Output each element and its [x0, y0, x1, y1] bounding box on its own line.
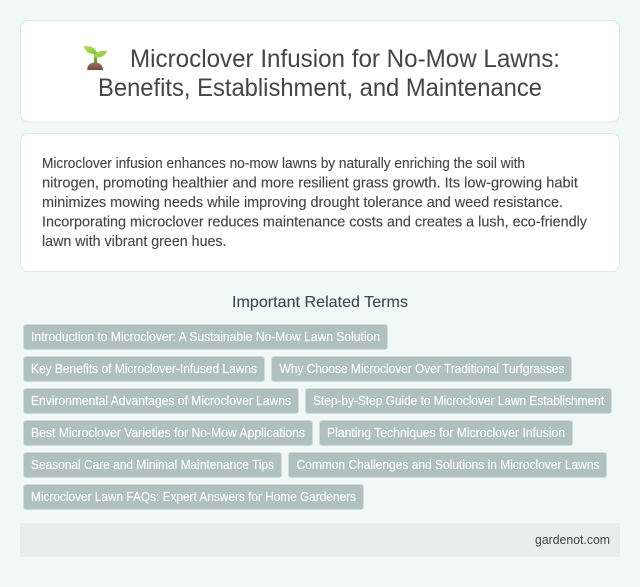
- tag: key benefits: Key Benefits of Microclover-Infused Lawns: [31, 362, 257, 376]
- tag: introduction: Introduction to Microclover: A Sustainable No-Mow Lawn Solution: [31, 330, 380, 344]
- tag: seasonal: Seasonal Care and Minimal Maintenance Tips: [31, 458, 274, 472]
- title panel: [20, 20, 620, 122]
- tag: challenges: Common Challenges and Solutions in Microclover Lawns: [296, 458, 600, 472]
- title: [98, 45, 560, 102]
- tag: why choose: Why Choose Microclover Over Traditional Turfgrasses: [280, 362, 564, 376]
- related terms tags: [24, 324, 612, 510]
- footer source text: gardenot.com: [535, 533, 610, 547]
- tag: seasonal: [24, 452, 282, 478]
- tag: key benefits: [24, 356, 264, 382]
- tag: planting: [320, 420, 572, 446]
- tag: challenges: [288, 452, 606, 478]
- tag: environmental: Environmental Advantages of Microclover Lawns: [31, 394, 291, 408]
- tag: environmental: [24, 388, 298, 414]
- tag: introduction: [24, 324, 388, 350]
- summary text: Microclover infusion enhances no-mow lawns by naturally enriching the soil with: [42, 156, 525, 172]
- panel: summary: [20, 134, 620, 272]
- summary text: Incorporating microclover reduces maintenance costs and creates a lush, eco-friendly: [42, 214, 588, 230]
- tag: step-by-step: [306, 388, 612, 414]
- footer: [20, 523, 620, 557]
- heading: related terms: Important Related Terms: [232, 294, 408, 311]
- tag: faqs: Microclover Lawn FAQs: Expert Answers for Home Gardeners: [31, 490, 356, 504]
- icon: seedling: [83, 46, 107, 70]
- tag: varieties: Best Microclover Varieties for No-Mow Applications: [31, 426, 305, 440]
- tag: varieties: [24, 420, 312, 446]
- tag: planting: Planting Techniques for Microclover Infusion: [327, 426, 565, 440]
- title: Benefits, Establishment, and Maintenance: [98, 74, 542, 102]
- summary text: [42, 156, 588, 250]
- summary text: minimizes mowing needs while improving drought tolerance and weed resistance.: [42, 195, 563, 211]
- title: Microclover Infusion for No-Mow Lawns:: [130, 45, 560, 73]
- tag: faqs: [24, 484, 364, 510]
- tag: step-by-step: Step-by-Step Guide to Microclover Lawn Establishment: [313, 394, 605, 408]
- summary text: lawn with vibrant green hues.: [42, 234, 226, 250]
- tag: why choose: [272, 356, 572, 382]
- summary text: nitrogen, promoting healthier and more resilient grass growth. Its low-growing habit: [42, 176, 578, 192]
